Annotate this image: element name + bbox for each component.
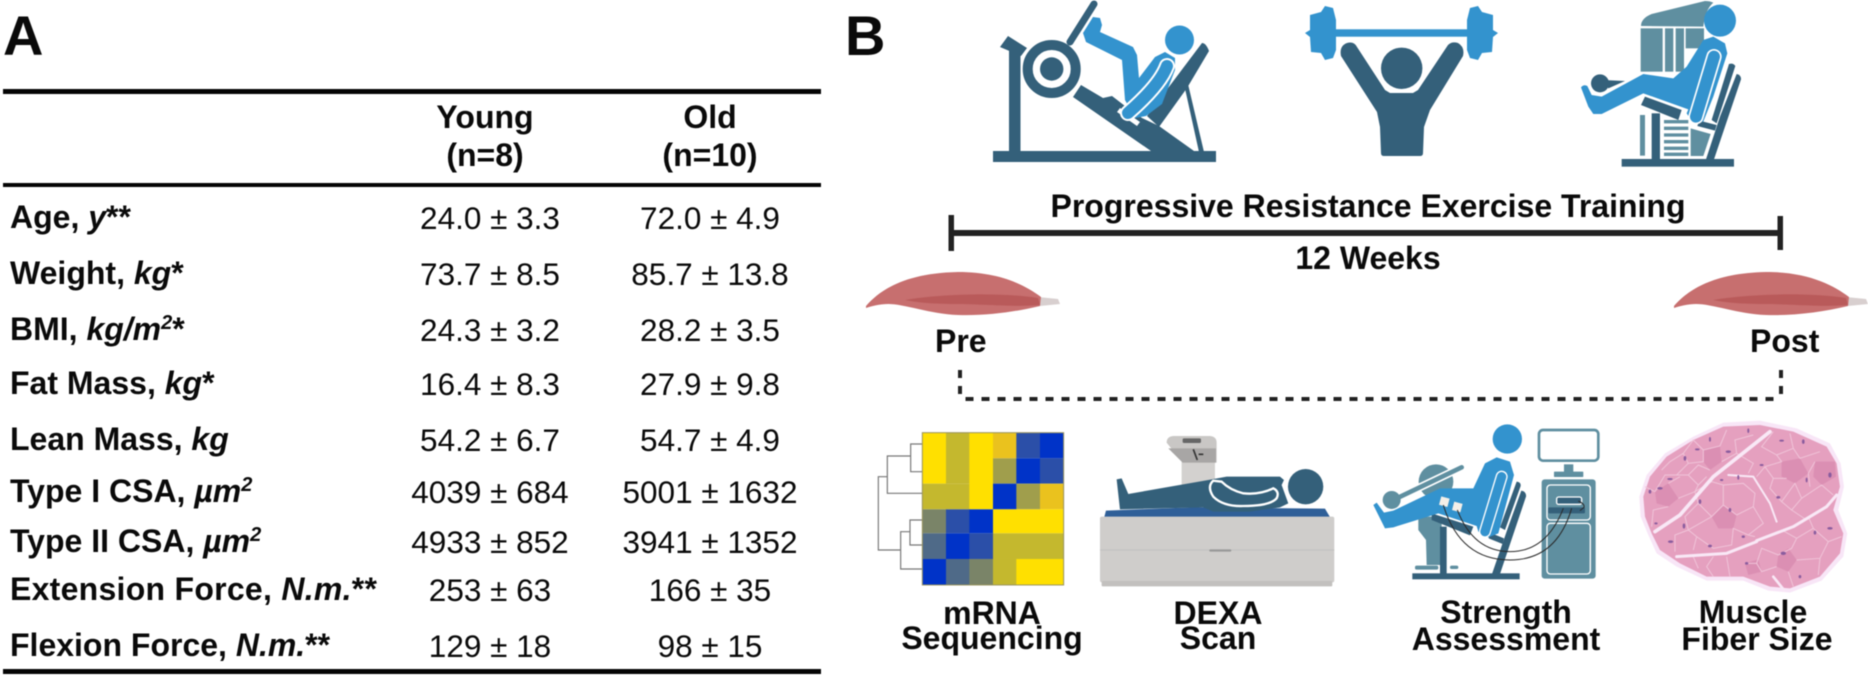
table rules	[3, 89, 821, 674]
dendrogram	[878, 444, 922, 569]
label: strength assessment: Strength	[1440, 594, 1572, 630]
row: extension force: 166 ± 35	[649, 572, 771, 608]
row: weight	[10, 255, 789, 292]
row: lean mass	[10, 421, 780, 458]
icon: leg extension machine	[1581, 1, 1741, 167]
heatmap cells	[922, 433, 1064, 585]
label: 12 weeks: 12 Weeks	[1295, 240, 1441, 276]
row: BMI: BMI, kg/m	[10, 311, 161, 347]
row: BMI: 2	[160, 312, 172, 334]
label: mRNA sequencing: mRNA	[943, 595, 1041, 631]
chart: heatmap with dendrogram	[878, 433, 1064, 585]
row: type I CSA: 5001 ± 1632	[623, 474, 797, 510]
row: type I CSA: Type I CSA, µm	[10, 473, 241, 509]
column header: Old: Old	[683, 99, 737, 135]
icon: muscle post	[1674, 272, 1868, 315]
row: age: Age, y**	[10, 199, 131, 235]
timeline bar	[948, 215, 1783, 251]
row: fat mass: Fat Mass, kg*	[10, 365, 215, 401]
icon: DEXA scanner	[1100, 436, 1334, 586]
row: extension force: 253 ± 63	[429, 572, 551, 608]
icon: muscle fiber histology	[1639, 421, 1847, 593]
row: weight: Weight, kg*	[10, 255, 184, 291]
row: type II CSA: 4933 ± 852	[411, 524, 569, 560]
heading: training title: Progressive Resistance Exercise Training	[1050, 188, 1686, 224]
label: Pre: Pre	[935, 323, 987, 359]
row: lean mass: 54.2 ± 6.7	[420, 422, 560, 458]
label: muscle fiber size: Fiber Size	[1681, 621, 1833, 657]
row: flexion force: Flexion Force, N.m.**	[10, 627, 331, 663]
row: weight: 73.7 ± 8.5	[420, 256, 560, 292]
row: BMI: 24.3 ± 3.2	[420, 312, 560, 348]
label: DEXA scan: Scan	[1180, 620, 1256, 656]
row: fat mass	[10, 365, 780, 402]
label: DEXA scan: DEXA	[1174, 595, 1262, 631]
row: age: 24.0 ± 3.3	[420, 200, 560, 236]
panel: table A	[3, 4, 821, 674]
row: fat mass: 16.4 ± 8.3	[420, 366, 560, 402]
label: Post: Post	[1750, 323, 1820, 359]
icon: leg press	[993, 4, 1216, 162]
row: type I CSA: 4039 ± 684	[411, 474, 569, 510]
label: muscle fiber size: Muscle	[1699, 594, 1807, 630]
row: lean mass: Lean Mass, kg	[10, 421, 229, 457]
row: flexion force: 129 ± 18	[429, 628, 551, 664]
row: type II CSA: Type II CSA, µm	[10, 523, 250, 559]
row: lean mass: 54.7 ± 4.9	[640, 422, 780, 458]
row: fat mass: 27.9 ± 9.8	[640, 366, 780, 402]
dashed bracket	[960, 370, 1781, 399]
column header: Young: (n=8)	[446, 137, 524, 173]
row: extension force	[10, 571, 771, 608]
row: type I CSA	[10, 473, 797, 510]
label: mRNA sequencing: Sequencing	[901, 620, 1083, 656]
column header: Young: Young	[436, 99, 534, 135]
icon: weightlifter	[1305, 6, 1498, 156]
label: strength assessment: Assessment	[1412, 621, 1601, 657]
row: BMI: 28.2 ± 3.5	[640, 312, 780, 348]
row: type II CSA: 2	[249, 524, 261, 546]
icon: strength assessment	[1373, 424, 1598, 579]
row: BMI	[10, 311, 780, 348]
row: weight: 85.7 ± 13.8	[631, 256, 789, 292]
row: flexion force	[10, 627, 762, 664]
row: age	[10, 199, 780, 236]
row: type II CSA: 3941 ± 1352	[623, 524, 797, 560]
row: BMI: *	[172, 311, 185, 347]
panel letter A: A	[3, 4, 43, 67]
row: age: 72.0 ± 4.9	[640, 200, 780, 236]
row: extension force: Extension Force, N.m.**	[10, 571, 377, 607]
panel: study design B	[845, 1, 1868, 657]
row: flexion force: 98 ± 15	[658, 628, 762, 664]
icon: muscle pre	[866, 272, 1060, 315]
row: type I CSA: 2	[240, 474, 252, 496]
row: type II CSA	[10, 523, 797, 560]
panel letter B: B	[845, 4, 885, 67]
column header: Old: (n=10)	[662, 137, 758, 173]
